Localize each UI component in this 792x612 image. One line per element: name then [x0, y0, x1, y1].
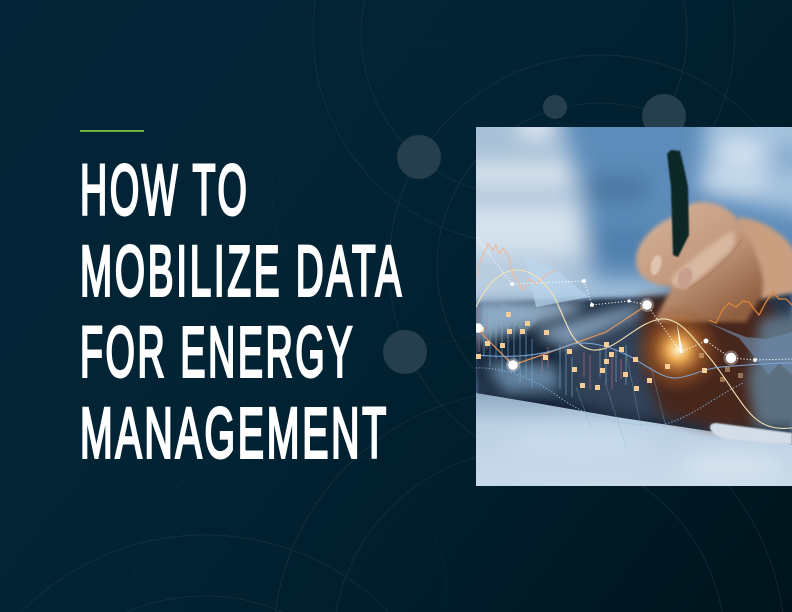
network node circles: [383, 94, 686, 374]
shirt background: [476, 127, 792, 445]
hand: [636, 202, 792, 429]
orange glow: [636, 310, 720, 392]
data point squares: [476, 312, 743, 391]
data lines: [476, 237, 792, 428]
stylus pillow highlight: [710, 423, 792, 445]
pen: [667, 150, 689, 257]
title: [80, 152, 404, 474]
tablet and desk: [476, 292, 792, 486]
green accent rule: [80, 130, 144, 132]
candlestick chart traces: [479, 305, 666, 447]
photo: hand writing on tablet with data overlay: [476, 127, 792, 486]
title: MOBILIZE DATA: [80, 232, 404, 312]
translucent chart areas: [496, 257, 792, 375]
title: FOR ENERGY: [80, 314, 355, 392]
title: MANAGEMENT: [80, 394, 389, 474]
glowing data points: [473, 279, 757, 372]
title: HOW TO: [80, 152, 250, 230]
